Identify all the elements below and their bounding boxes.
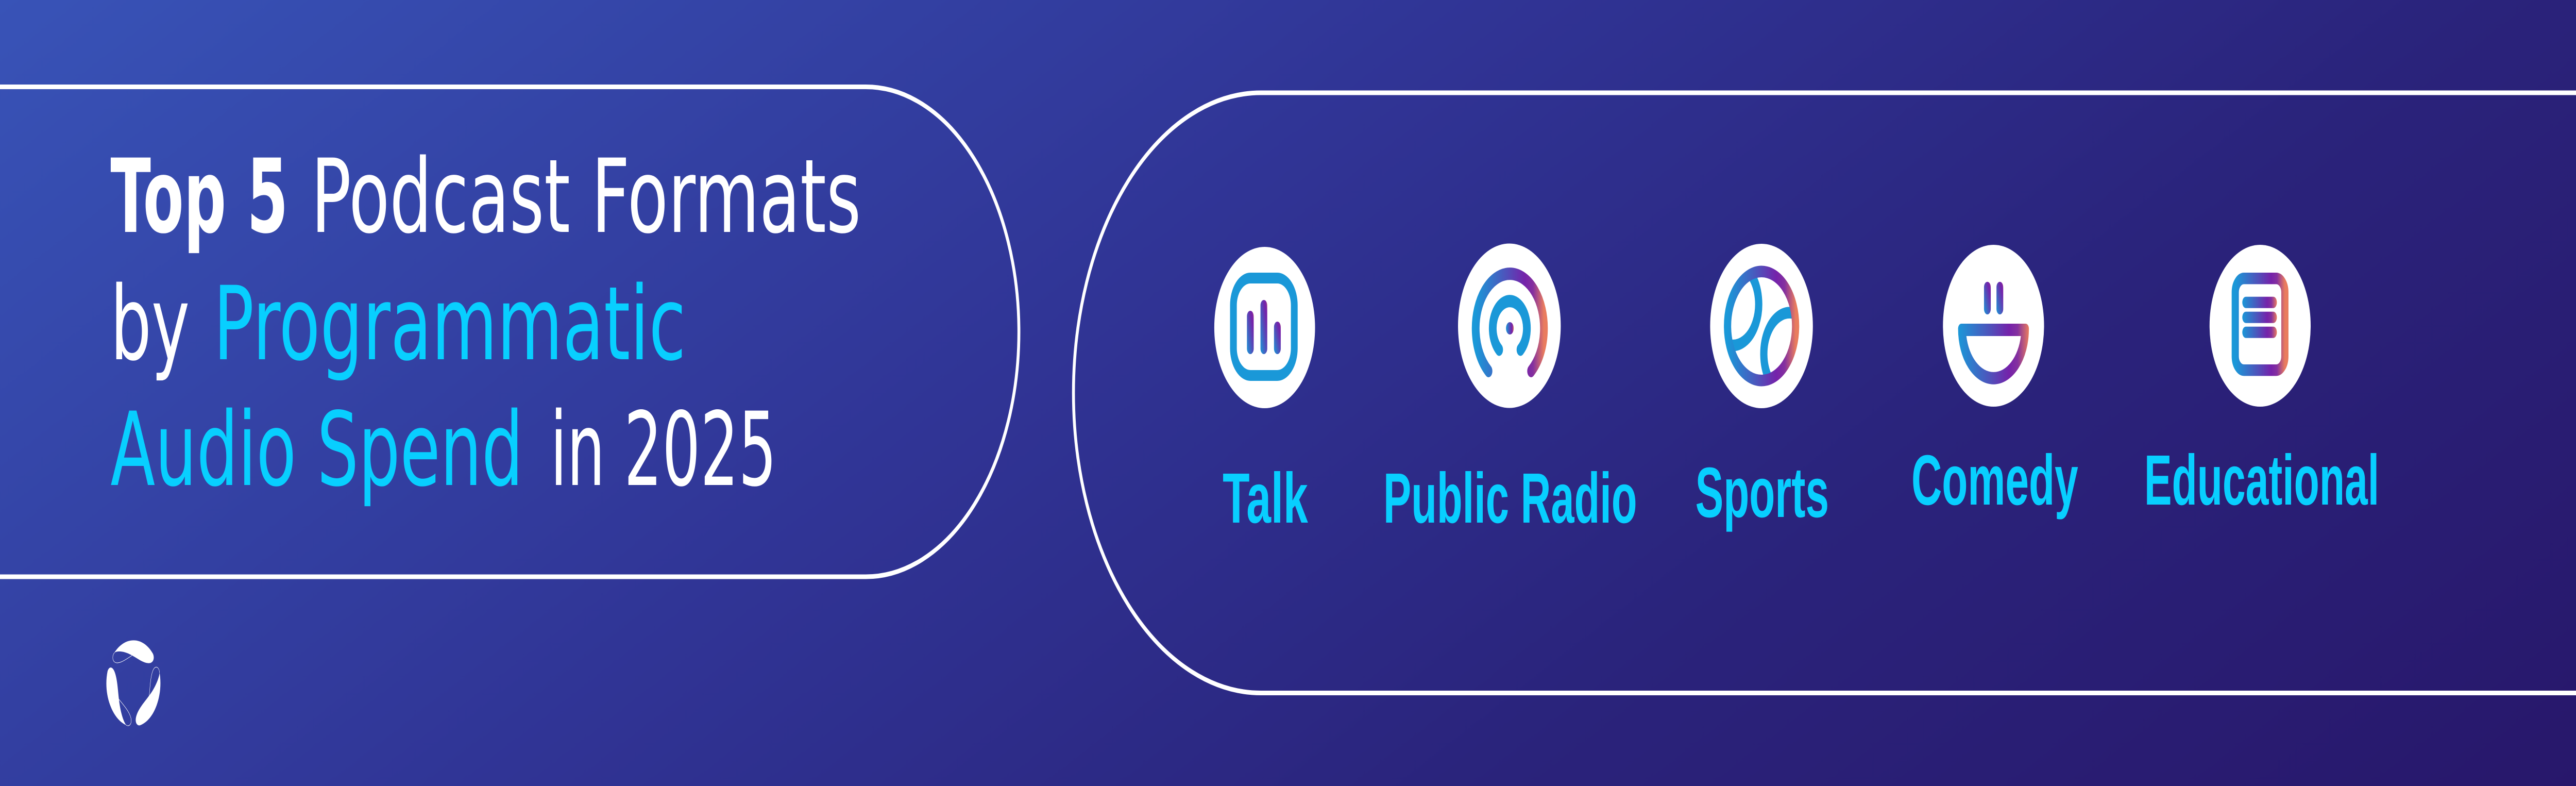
label: educational: Educational: [2144, 441, 2379, 520]
icon: comedy: [1943, 245, 2044, 407]
icon: talk: [1214, 247, 1315, 408]
title: Programmatic: [213, 265, 686, 383]
panel: formats outline: [1074, 93, 2576, 693]
panel: title outline: [0, 87, 1019, 577]
title: in 2025: [550, 391, 776, 509]
title: Podcast Formats: [311, 138, 861, 256]
label: comedy: Comedy: [1911, 441, 2078, 520]
icon: educational: [2210, 245, 2311, 407]
icon: sports: [1710, 244, 1813, 408]
label: talk: Talk: [1223, 459, 1308, 538]
title: by: [110, 265, 190, 383]
icon: company logo: [100, 640, 167, 733]
icon: public radio: [1458, 243, 1561, 408]
label: public radio: Public Radio: [1383, 459, 1637, 538]
title: [110, 138, 861, 509]
title: Top 5: [110, 138, 288, 256]
title: Audio Spend: [110, 391, 523, 509]
label: sports: Sports: [1696, 453, 1829, 532]
